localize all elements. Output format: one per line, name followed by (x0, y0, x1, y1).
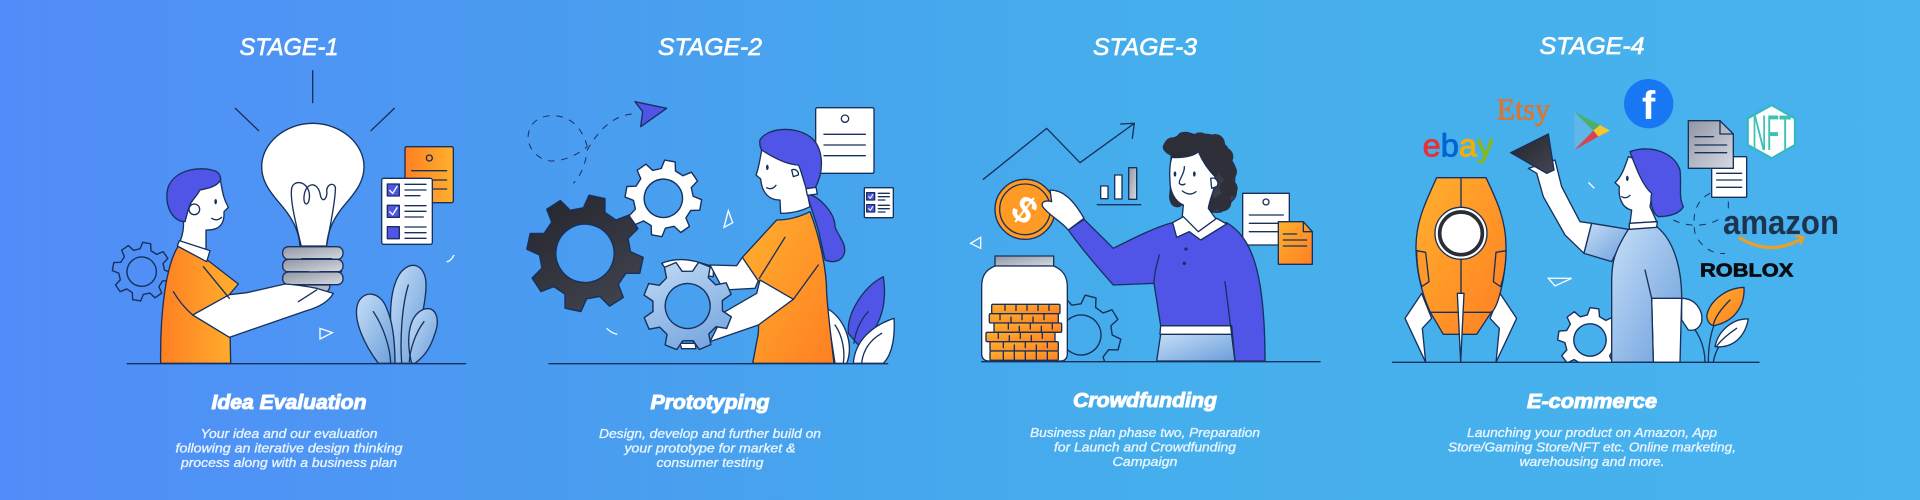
description: e-commerce: Launching your product on Amazon, App (1467, 426, 1717, 440)
panel: stage 1 idea evaluation (108, 34, 466, 470)
heading: stage 1: STAGE-1 (240, 34, 338, 61)
heading: stage 3: STAGE-3 (1093, 34, 1198, 61)
dashed trail (1673, 193, 1728, 254)
icon: light bulb (235, 71, 394, 296)
illustration: rocket launch with marketplace logos: NFT (1752, 105, 1791, 161)
logo: facebook (1624, 79, 1673, 128)
decorations: triangle and squiggle (607, 211, 733, 334)
icon: rocket (1405, 178, 1517, 362)
heading: stage 2: STAGE-2 (658, 34, 762, 61)
description: crowdfunding: Campaign (1112, 455, 1178, 469)
icon: document (816, 108, 874, 173)
illustration: person holding light bulb (108, 71, 466, 364)
description: crowdfunding: Business plan phase two, Preparation (1030, 426, 1260, 440)
icon: plant (1682, 287, 1748, 362)
heading: stage 4: STAGE-4 (1540, 33, 1644, 60)
description: prototyping: consumer testing (656, 456, 764, 470)
chart: trend arrow (983, 123, 1134, 179)
icon: plant (356, 265, 437, 363)
decorations: triangle and tick (320, 255, 454, 339)
logo: facebook: f (1642, 84, 1656, 128)
icon: documents (1243, 193, 1312, 264)
decorations: triangle and tick (1548, 182, 1594, 286)
icon: small checklist (864, 188, 893, 218)
description: prototyping (599, 427, 821, 470)
icon: jar of coins (982, 256, 1067, 361)
chart: small bars (1097, 168, 1141, 205)
icon: paper plane with dashed trail (528, 102, 667, 183)
ground line (982, 360, 1320, 364)
logo: ebay: ebay (1423, 127, 1494, 164)
description: idea evaluation: process along with a business plan (180, 456, 397, 470)
person: woman in orange shirt (630, 129, 845, 364)
decoration: triangle (971, 237, 981, 248)
person: woman in blue top (1042, 132, 1265, 361)
person: man in orange shirt (161, 169, 333, 363)
description: e-commerce (1448, 426, 1736, 469)
icon: gear outline (1064, 294, 1122, 361)
panel: stage 4 e-commerce (1393, 33, 1839, 469)
ground line (549, 362, 888, 366)
description: idea evaluation: following an iterative design thinking (176, 442, 403, 456)
icon: documents (1688, 121, 1747, 197)
title: crowdfunding: Crowdfunding (1073, 390, 1217, 412)
description: prototyping: Design, develop and further build on (599, 427, 821, 441)
logo: play triangle (1574, 112, 1610, 150)
logo: NFT hexagon (1748, 105, 1795, 161)
description: prototyping: your prototype for market & (623, 442, 796, 456)
icon: gears (517, 154, 707, 322)
description: crowdfunding: for Launch and Crowdfunding (1054, 440, 1236, 454)
icon: dollar coin: $ (1004, 187, 1046, 233)
logo: etsy: Etsy (1497, 92, 1551, 126)
icon: documents and checklist (382, 147, 453, 244)
description: e-commerce: warehousing and more. (1520, 455, 1664, 469)
title: idea evaluation: Idea Evaluation (212, 392, 366, 414)
panel: stage 3 crowdfunding (971, 34, 1320, 469)
description: crowdfunding (1030, 426, 1260, 469)
icon: funnel held in hand (1511, 134, 1554, 173)
logo: roblox: ROBLOX (1700, 260, 1794, 281)
title: prototyping: Prototyping (650, 392, 770, 414)
icon: gear outline (108, 238, 175, 305)
logo: amazon: amazon (1723, 204, 1839, 242)
panel: stage 2 prototyping (517, 34, 894, 470)
title: e-commerce: E-commerce (1527, 391, 1657, 413)
illustration: rocket launch with marketplace logos (1393, 79, 1839, 376)
description: idea evaluation (176, 427, 403, 470)
illustration: woman assembling gears (517, 102, 894, 364)
description: e-commerce: Store/Gaming Store/NFT etc. Online marketing, (1448, 440, 1736, 454)
description: idea evaluation: Your idea and our evaluation (200, 427, 378, 441)
person: woman with raised arm (1528, 149, 1683, 362)
icon: plant (827, 277, 894, 363)
icon: gear (1557, 307, 1611, 362)
ground line (1393, 360, 1759, 364)
icon: dollar coin (995, 179, 1055, 239)
ground line (127, 362, 466, 366)
illustration: woman dropping coin in jar (971, 123, 1320, 383)
